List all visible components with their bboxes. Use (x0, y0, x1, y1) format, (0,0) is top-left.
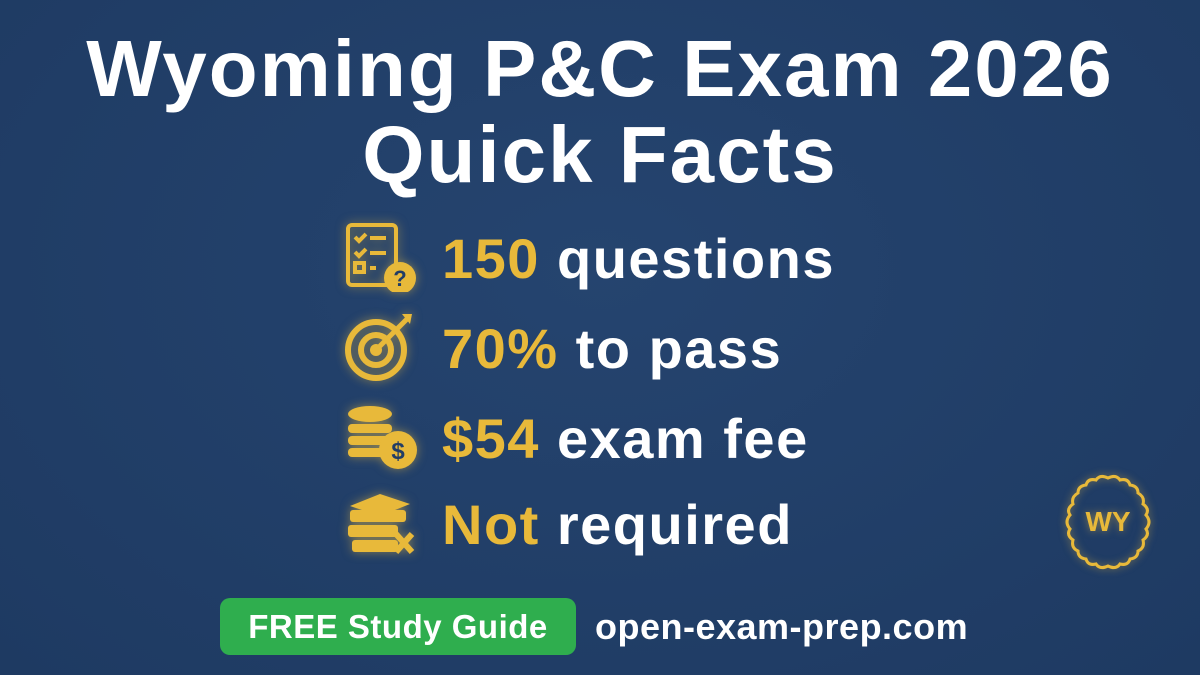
button: free study guide (220, 598, 576, 655)
icon: books with x (342, 488, 418, 558)
text: 70% to pass (442, 317, 782, 380)
row: fee (343, 400, 809, 475)
icon: coins (343, 400, 423, 475)
badge: WY (1061, 470, 1155, 574)
title (86, 24, 1114, 199)
icon: checklist (340, 217, 422, 298)
badge: WY: WY (1085, 506, 1131, 537)
url: open-exam-prep.com (595, 606, 968, 647)
title: Wyoming P&C Exam 2026 (86, 24, 1114, 113)
row: pass (339, 309, 782, 387)
icon: target (339, 309, 416, 387)
icon: checklist: ? (393, 266, 407, 291)
text: Not required (442, 493, 793, 556)
title: Quick Facts (362, 110, 838, 199)
row: prelicensing (342, 488, 793, 558)
icon: coins: $ (391, 438, 405, 465)
text: 150 questions (442, 227, 835, 290)
row: questions (340, 217, 835, 298)
button: free study guide: FREE Study Guide (248, 608, 548, 645)
text: $54 exam fee (442, 407, 809, 470)
